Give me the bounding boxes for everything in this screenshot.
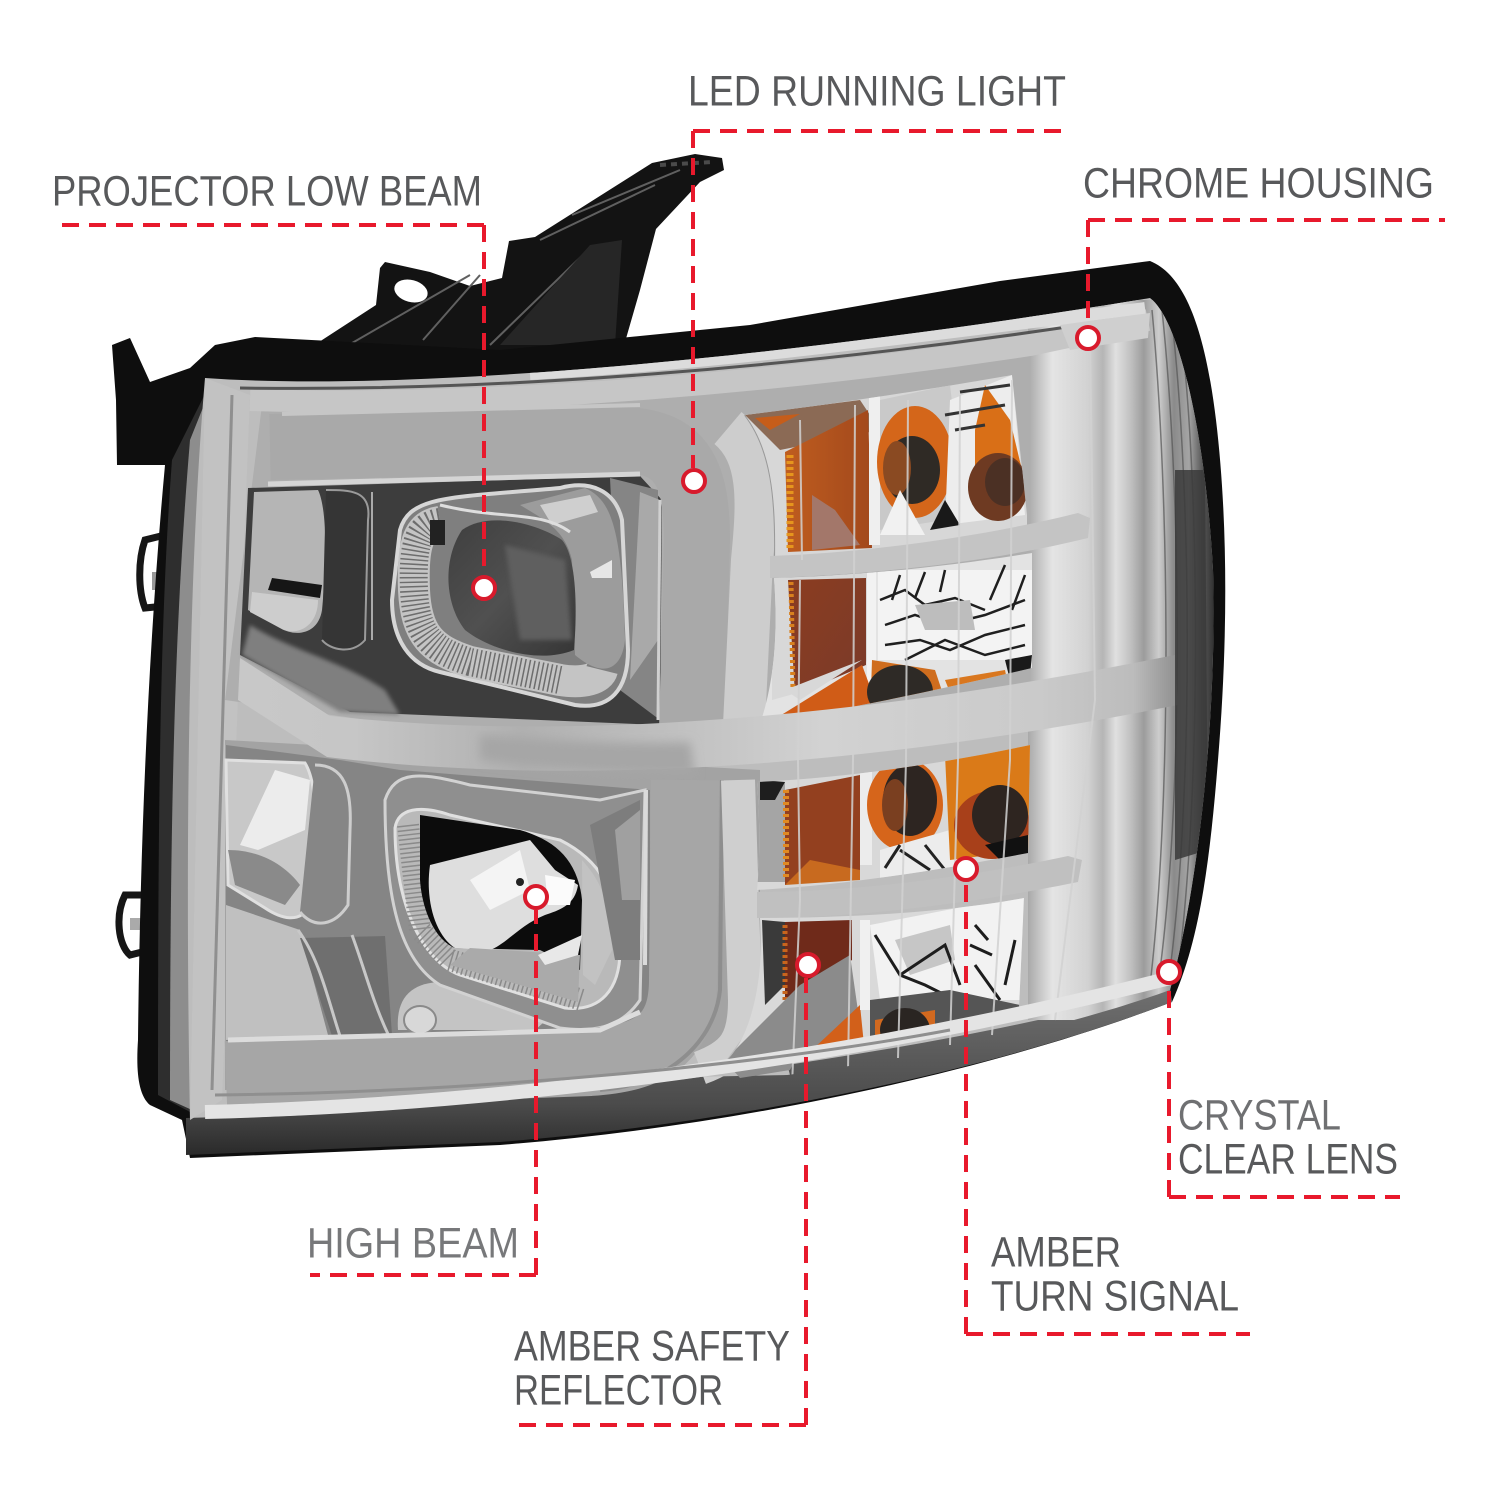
projector dark lens	[448, 520, 576, 656]
mounting bracket	[299, 154, 724, 372]
metallic right side	[520, 488, 625, 669]
lens content	[190, 300, 1218, 1120]
callout: high beam	[307, 886, 547, 1275]
top chrome strip	[250, 320, 1148, 401]
bottom left amber wedge	[735, 1063, 792, 1078]
callout: LED running light: LED RUNNING LIGHT	[688, 68, 1066, 116]
lower amber compartment	[757, 745, 1030, 890]
callout: amber turn signal: TURN SIGNAL	[991, 1272, 1239, 1320]
right chrome column	[1028, 300, 1218, 1020]
callout: amber turn signal	[955, 858, 1250, 1334]
left mounting tabs	[119, 535, 165, 955]
callout: projector low beam: PROJECTOR LOW BEAM	[52, 168, 482, 216]
upper small chrome bar	[770, 513, 1090, 578]
lens base	[188, 298, 1214, 1120]
upper panel base	[225, 350, 1030, 760]
callout: amber safety reflector: AMBER SAFETY	[514, 1322, 790, 1370]
lower left reflector	[226, 745, 650, 1060]
left reflector top	[248, 490, 325, 633]
bottom dark band	[186, 988, 1172, 1155]
lens flute lines	[792, 340, 1095, 1085]
hatched ring	[414, 522, 602, 681]
chrome opening	[420, 815, 582, 970]
outer left lens edge	[158, 380, 212, 1112]
callout: crystal clear lens	[1158, 961, 1400, 1197]
hatched surround	[408, 825, 582, 1000]
second chrome arc	[728, 428, 756, 725]
callout: amber safety reflector: REFLECTOR	[514, 1366, 723, 1414]
lower white chrome trim	[205, 978, 1170, 1112]
right side gray panel	[610, 478, 660, 720]
callout: crystal clear lens: CRYSTAL	[1178, 1092, 1341, 1140]
left frame strip	[190, 378, 206, 1120]
LED light tube U shape	[226, 405, 775, 1090]
bottom amber compartment	[720, 895, 1030, 1065]
headlight assembly	[112, 154, 1225, 1158]
callout: LED running light	[683, 68, 1068, 492]
upper amber compartment	[745, 375, 1027, 556]
callout: crystal clear lens: CLEAR LENS	[1178, 1136, 1398, 1184]
main horizontal chrome band	[238, 655, 1178, 771]
high beam reflector	[385, 776, 645, 1030]
lower small chrome bar	[757, 856, 1082, 918]
callout: high beam: HIGH BEAM	[307, 1220, 519, 1268]
callout: amber safety reflector	[510, 954, 819, 1425]
black housing silhouette	[112, 261, 1225, 1158]
projector low beam	[392, 485, 628, 706]
callout: chrome housing: CHROME HOUSING	[1083, 160, 1434, 208]
lower panel base	[225, 740, 760, 1090]
middle chrome compartment	[762, 553, 1032, 716]
right dark vertical stripe	[1175, 470, 1208, 860]
callout: chrome housing	[1077, 160, 1445, 349]
callout: amber turn signal: AMBER	[991, 1228, 1121, 1276]
callout: projector low beam	[52, 168, 495, 599]
upper left dark cell	[240, 476, 662, 725]
